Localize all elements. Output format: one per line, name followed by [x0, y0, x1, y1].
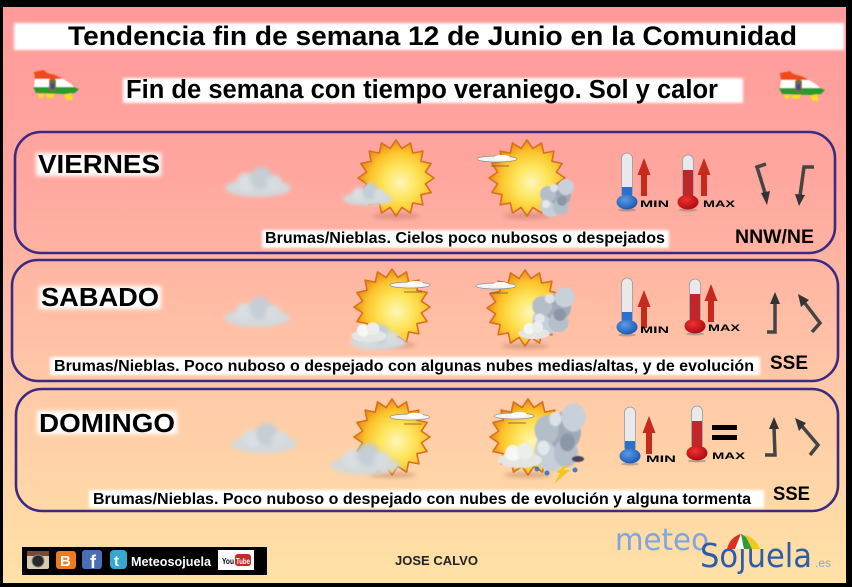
- logo meteosojuela: Sojuela: [700, 536, 812, 575]
- logo meteosojuela: meteo: [615, 523, 709, 558]
- social handle: Meteosojuela: [131, 554, 212, 569]
- icon: twitter: t: [114, 553, 119, 570]
- icon: fog: [224, 297, 290, 327]
- icon: min thermometer up: MIN: [640, 199, 669, 210]
- icon: min thermometer up: MIN: [640, 325, 669, 336]
- icon: storm: [490, 399, 586, 484]
- icon: twitter: [110, 550, 127, 570]
- wind label domingo: SSE: [773, 484, 810, 505]
- icon: wind arrow 1: [765, 417, 779, 455]
- icon: max thermometer up: [684, 279, 741, 336]
- icon: instagram: [27, 551, 49, 569]
- icon: blogger: [56, 551, 76, 570]
- icon: min thermometer up: [616, 153, 669, 212]
- icon: sun with high and evolution clouds: [477, 140, 574, 219]
- icon: facebook: [82, 550, 102, 572]
- icon: max thermometer up: MAX: [703, 199, 736, 210]
- icon: wind arrow 2: [798, 294, 820, 332]
- logo meteosojuela: [615, 523, 831, 575]
- icon: blogger: B: [60, 553, 71, 570]
- logo meteosojuela: .es: [815, 556, 831, 570]
- icon: sun with fog and high cloud: [330, 399, 430, 478]
- icon: wind arrow 1: [757, 164, 770, 205]
- wind label sabado: SSE: [770, 353, 808, 374]
- icon: facebook: f: [90, 552, 97, 572]
- icon: max thermometer equal: MAX: [712, 451, 746, 462]
- icon: fog: [231, 423, 297, 453]
- author: JOSE CALVO: [395, 554, 478, 568]
- icon: max thermometer equal: [686, 406, 746, 462]
- icon: wind arrow 1: [767, 292, 780, 332]
- icon: fog: [225, 167, 291, 197]
- icon: min thermometer up: MIN: [646, 454, 676, 465]
- icon: youtube: Tube: [236, 556, 250, 566]
- description domingo: Brumas/Nieblas. Poco nuboso o despejado con nubes de evolución y alguna tormenta: [93, 491, 751, 508]
- icon: youtube: You: [222, 556, 234, 566]
- icon: sun with clouds: [476, 270, 575, 349]
- day label viernes: VIERNES: [38, 149, 160, 179]
- icon: min thermometer up: [616, 278, 669, 336]
- panel: sabado: [12, 260, 838, 381]
- panel: viernes: [15, 132, 835, 253]
- title: Tendencia fin de semana 12 de Junio en la Comunidad: [68, 21, 797, 51]
- icon: sun with fog and high cloud: [350, 269, 430, 350]
- icon: min thermometer up: [620, 407, 676, 466]
- wind label viernes: NNW/NE: [735, 227, 814, 248]
- icon: youtube: [218, 550, 254, 570]
- description sabado: Brumas/Nieblas. Poco nuboso o despejado con algunas nubes medias/altas, y de evolución: [54, 358, 754, 375]
- icon: sun with fog: [343, 140, 434, 219]
- panel: domingo: [16, 389, 838, 511]
- icon: umbrella: [727, 534, 760, 549]
- subtitle: Fin de semana con tiempo veraniego. Sol y calor: [126, 76, 718, 104]
- icon: wind arrow 2: [795, 418, 818, 455]
- icon: max thermometer up: MAX: [708, 323, 741, 334]
- icon: wind arrow 2: [795, 167, 814, 206]
- icon: La Rioja flag left: [33, 70, 79, 100]
- description viernes: Brumas/Nieblas. Cielos poco nubosos o despejados: [265, 230, 665, 247]
- day label sabado: SABADO: [41, 282, 159, 312]
- icon: La Rioja flag right: [779, 71, 825, 101]
- social media bar: [22, 547, 267, 575]
- day label domingo: DOMINGO: [39, 408, 175, 438]
- icon: max thermometer up: [678, 155, 736, 212]
